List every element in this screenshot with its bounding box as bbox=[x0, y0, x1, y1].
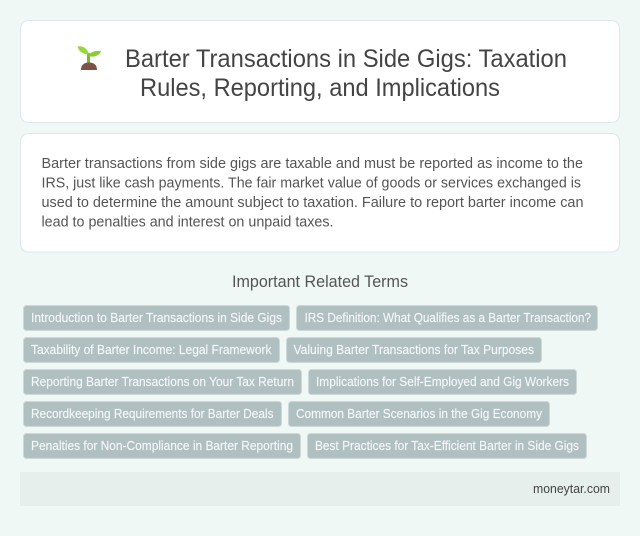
chip: penalties bbox=[24, 434, 300, 458]
chip: common scenarios: Common Barter Scenarios in the Gig Economy bbox=[296, 407, 543, 421]
title bbox=[125, 45, 567, 102]
icon: seedling bbox=[78, 46, 101, 70]
chip: valuing: Valuing Barter Transactions for Tax Purposes bbox=[294, 343, 534, 357]
chip: implications: Implications for Self-Employed and Gig Workers bbox=[316, 375, 569, 389]
text block: description: lead to penalties and interest on unpaid taxes. bbox=[42, 214, 334, 230]
chip: penalties: Penalties for Non-Compliance in Barter Reporting bbox=[31, 439, 293, 453]
chip: implications bbox=[308, 370, 576, 394]
chip: recordkeeping: Recordkeeping Requirements for Barter Deals bbox=[31, 407, 274, 421]
text block: description: IRS, just like cash payments. The fair market value of goods or services exchanged is bbox=[42, 176, 581, 192]
chip: recordkeeping bbox=[24, 402, 282, 426]
chip: taxability bbox=[24, 338, 280, 362]
footer bbox=[20, 472, 620, 506]
chip: introduction: Introduction to Barter Transactions in Side Gigs bbox=[31, 311, 282, 325]
chip: common scenarios bbox=[288, 402, 550, 426]
chip: introduction bbox=[24, 306, 290, 330]
chip: taxability: Taxability of Barter Income: Legal Framework bbox=[31, 343, 272, 357]
text block: description bbox=[42, 156, 584, 230]
panel: description bbox=[20, 134, 620, 252]
chip: valuing bbox=[286, 338, 542, 362]
chip: IRS definition bbox=[296, 306, 598, 330]
text block: description: Barter transactions from side gigs are taxable and must be reported as income to the bbox=[42, 156, 583, 172]
text block: description: used to determine the amount subject to taxation. Failure to report barter income can bbox=[42, 195, 584, 211]
chip: reporting: Reporting Barter Transactions on Your Tax Return bbox=[31, 375, 294, 389]
chip: reporting bbox=[24, 370, 302, 394]
term chips bbox=[24, 306, 598, 458]
chip: best practices bbox=[308, 434, 586, 458]
heading: important related terms: Important Related Terms bbox=[232, 273, 408, 291]
footer text: moneytar.com bbox=[533, 482, 610, 496]
title: Rules, Reporting, and Implications bbox=[140, 74, 500, 102]
title: Barter Transactions in Side Gigs: Taxation bbox=[125, 45, 567, 73]
chip: IRS definition: IRS Definition: What Qualifies as a Barter Transaction? bbox=[304, 311, 591, 325]
panel: title card bbox=[20, 20, 620, 122]
chip: best practices: Best Practices for Tax-Efficient Barter in Side Gigs bbox=[315, 439, 579, 453]
